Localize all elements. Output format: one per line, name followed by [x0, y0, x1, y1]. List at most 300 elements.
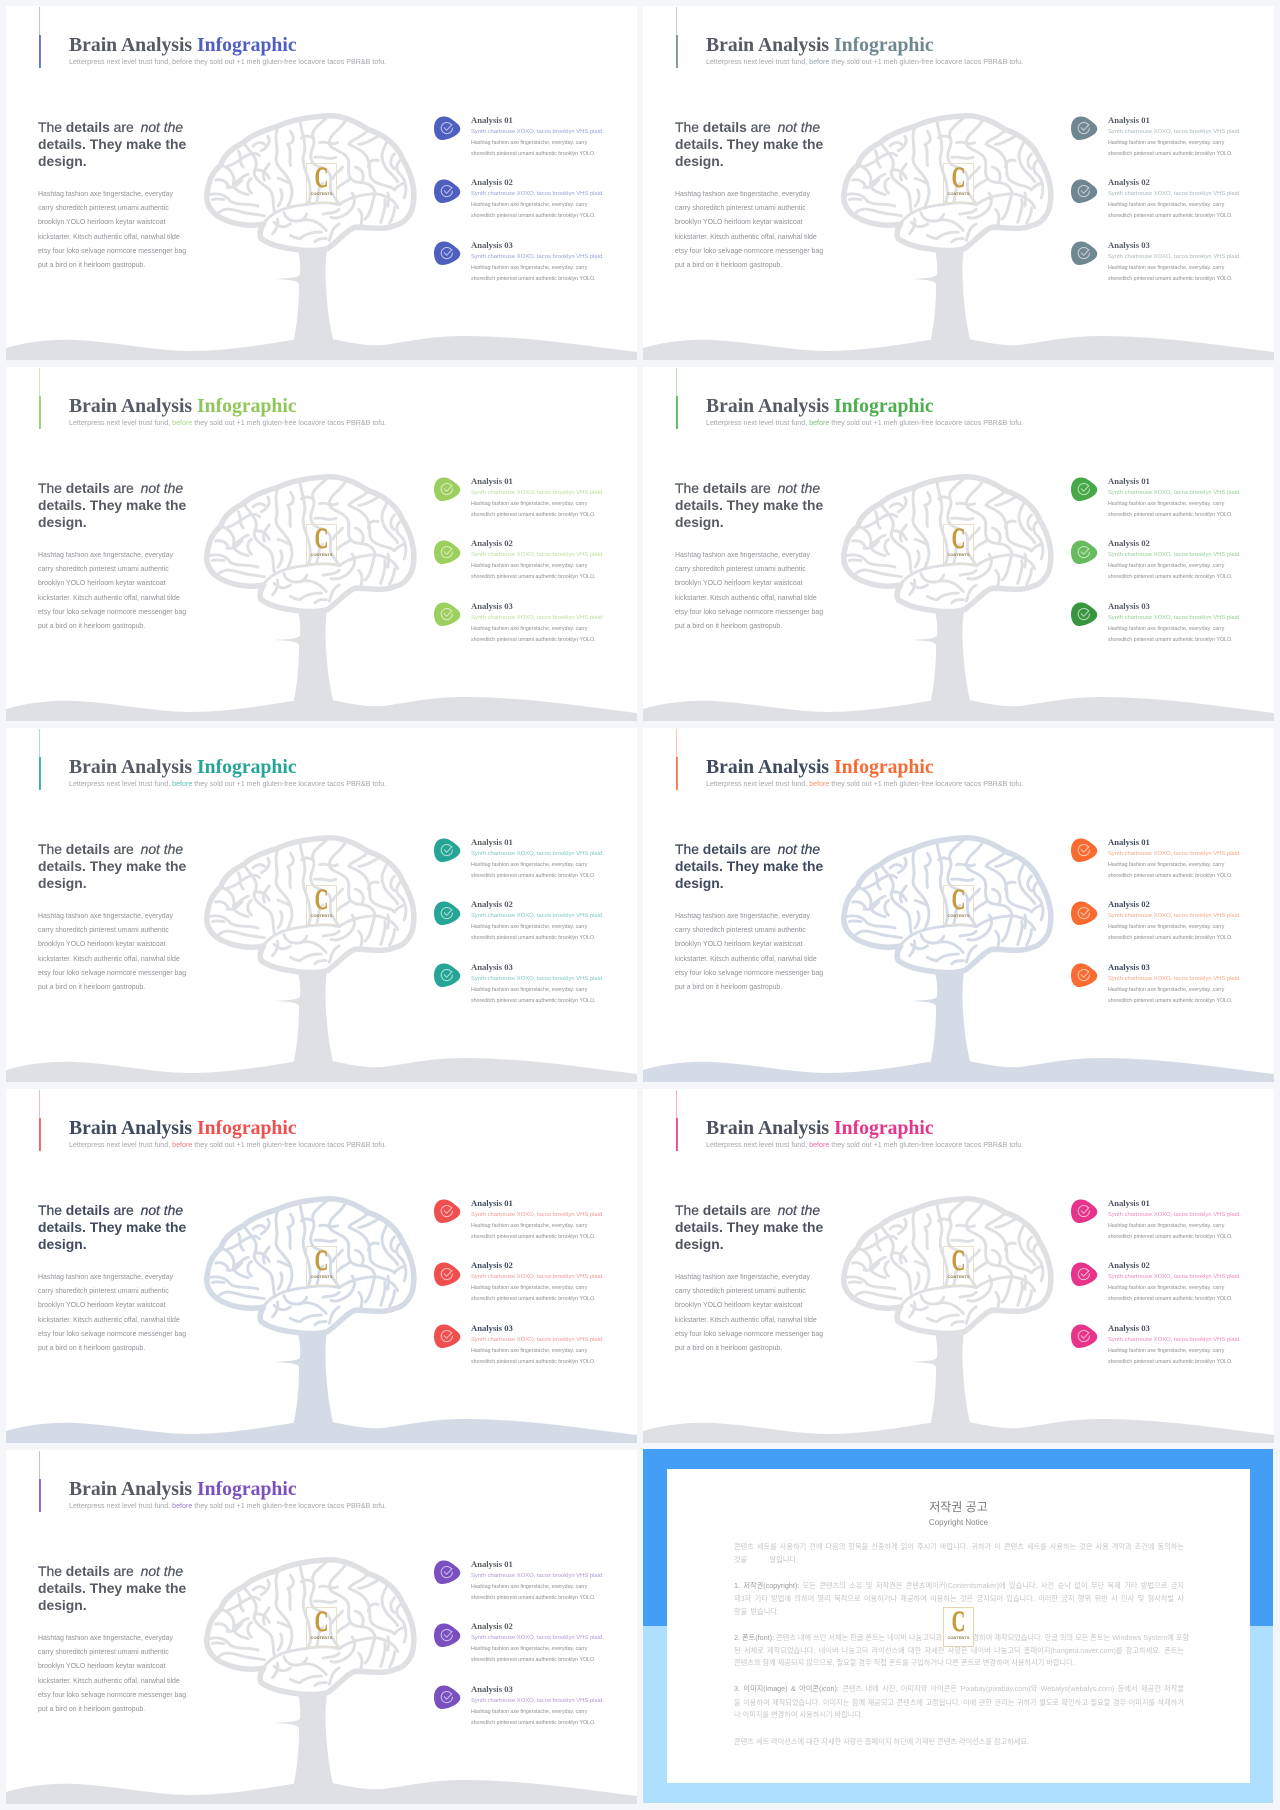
analysis 01: shoreditch pinterest umami authentic brooklyn YOLO.: [471, 1594, 596, 1600]
body text: [675, 191, 823, 269]
notice card: 것을 알립니다.: [734, 1554, 798, 1564]
body text: brooklyn YOLO heirloom keytar waistcoat: [38, 941, 166, 948]
body text: etsy four loko selvage normcore messenger bag: [38, 1692, 186, 1699]
title: Brain Analysis Infographic: [69, 394, 297, 416]
analysis 01: Hashtag fashion axe fingerstache, everyday. carry: [471, 1584, 587, 1590]
notice card: 나 이미지를 변경하여 사용하시기 바랍니다.: [734, 1710, 863, 1719]
body text: etsy four loko selvage normcore messenger bag: [675, 248, 823, 255]
notice heading: 저작권 공고: [929, 1500, 988, 1514]
analysis 01: shoreditch pinterest umami authentic brooklyn YOLO.: [1108, 1234, 1233, 1240]
body text: put a bird on it heirloom gastropub.: [38, 623, 145, 630]
analysis 02: shoreditch pinterest umami authentic brooklyn YOLO.: [471, 574, 596, 580]
logo stamp: CONTENTS: [948, 552, 970, 557]
logo stamp: [306, 163, 337, 203]
analysis 03: Synth chartreuse XOXO, tacos brooklyn VHS plaid.: [1108, 614, 1241, 620]
heading: [38, 1562, 186, 1614]
analysis 03: Synth chartreuse XOXO, tacos brooklyn VHS plaid.: [471, 1336, 604, 1342]
analysis 01: shoreditch pinterest umami authentic brooklyn YOLO.: [1108, 150, 1233, 156]
analysis 01: shoreditch pinterest umami authentic brooklyn YOLO.: [471, 512, 596, 518]
body text: etsy four loko selvage normcore messenger bag: [38, 1331, 186, 1338]
analysis 02: [434, 538, 604, 580]
panel: slide orange: [643, 728, 1274, 1082]
subtitle: Letterpress next level trust fund, before they sold out +1 meh gluten-free locavore tacos PBR&B tofu.: [706, 58, 1023, 66]
analysis 01: Analysis 01: [471, 114, 513, 124]
title: Brain Analysis Infographic: [706, 34, 934, 56]
body text: kickstarter. Kitsch authentic offal, narwhal tilde: [38, 234, 180, 241]
analysis 02: Analysis 02: [471, 177, 513, 187]
analysis 03: Analysis 03: [471, 600, 513, 610]
body text: brooklyn YOLO heirloom keytar waistcoat: [675, 1302, 803, 1309]
accent rule: [676, 7, 677, 68]
accent rule: [39, 1451, 40, 1512]
body text: Hashtag fashion axe fingerstache, everyday: [38, 1274, 173, 1281]
analysis 03: Synth chartreuse XOXO, tacos brooklyn VHS plaid.: [471, 614, 604, 620]
body text: Hashtag fashion axe fingerstache, everyday: [675, 191, 810, 198]
analysis 01: Synth chartreuse XOXO, tacos brooklyn VHS plaid.: [471, 490, 604, 496]
heading: The details are not the: [38, 840, 183, 856]
title: Brain Analysis Infographic: [69, 1116, 297, 1138]
body text: put a bird on it heirloom gastropub.: [38, 262, 145, 269]
body text: put a bird on it heirloom gastropub.: [38, 1345, 145, 1352]
body text: kickstarter. Kitsch authentic offal, narwhal tilde: [38, 1317, 180, 1324]
analysis 02: Hashtag fashion axe fingerstache, everyday. carry: [1108, 924, 1224, 930]
analysis 02: shoreditch pinterest umami authentic brooklyn YOLO.: [1108, 935, 1233, 941]
body text: Hashtag fashion axe fingerstache, everyday: [38, 191, 173, 198]
body text: Hashtag fashion axe fingerstache, everyday: [38, 1635, 173, 1642]
panel: slide teal: [6, 728, 637, 1082]
analysis 01: [1071, 114, 1241, 156]
analysis 01: Analysis 01: [471, 476, 513, 486]
heading: design.: [38, 152, 87, 168]
body text: [675, 552, 823, 630]
body text: kickstarter. Kitsch authentic offal, narwhal tilde: [675, 234, 817, 241]
analysis 01: Hashtag fashion axe fingerstache, everyday. carry: [471, 1222, 587, 1228]
analysis 01: Analysis 01: [1108, 836, 1150, 846]
analysis 03: Analysis 03: [471, 1684, 513, 1694]
body text: carry shoreditch pinterest umami authentic: [38, 205, 169, 212]
panel: slide indigo: [6, 6, 637, 360]
body text: kickstarter. Kitsch authentic offal, narwhal tilde: [38, 956, 180, 963]
body text: brooklyn YOLO heirloom keytar waistcoat: [38, 1663, 166, 1670]
body text: kickstarter. Kitsch authentic offal, narwhal tilde: [38, 1678, 180, 1685]
analysis 03: Synth chartreuse XOXO, tacos brooklyn VHS plaid.: [471, 254, 604, 260]
body text: brooklyn YOLO heirloom keytar waistcoat: [38, 219, 166, 226]
analysis 01: [434, 1558, 624, 1606]
analysis 01: Analysis 01: [471, 1198, 513, 1208]
analysis 03: [434, 240, 604, 282]
body text: [675, 910, 823, 995]
notice card: 제3자 기타 방법에 의하여 영리 목적으로 이용하거나 제공하여 이용하는 것은 금지되어 있습니다. 이러한 금지 행위 위반 시 민사 및 형사처벌 사: [734, 1594, 1184, 1603]
section 2 font: 2. 폰트(font): 콘텐츠 내에 쓰인 서체는 한글 폰트는 네이버 나눔고딕과 서체로 변경하여 제작되었습니다. 한글 외의 모든 폰트는 Windows System에 포함: [734, 1633, 1189, 1642]
analysis 01: Analysis 01: [471, 1558, 513, 1568]
heading: design.: [38, 1596, 87, 1612]
analysis 02: Analysis 02: [471, 899, 513, 909]
logo stamp: [943, 1607, 974, 1647]
logo stamp: CONTENTS: [310, 191, 332, 196]
analysis 02: Synth chartreuse XOXO, tacos brooklyn VHS plaid.: [1108, 552, 1241, 558]
logo stamp: [306, 1246, 337, 1286]
panel: copyright notice: [643, 1449, 1273, 1803]
brain tree illustration: [6, 1089, 637, 1443]
analysis 03: Hashtag fashion axe fingerstache, everyday. carry: [471, 626, 587, 632]
analysis 01: [434, 1198, 624, 1246]
heading: The details are not the: [675, 840, 820, 856]
heading: details. They make the: [675, 136, 823, 152]
subtitle: Letterpress next level trust fund, before they sold out +1 meh gluten-free locavore tacos PBR&B tofu.: [69, 419, 386, 427]
analysis 01: shoreditch pinterest umami authentic brooklyn YOLO.: [1108, 512, 1233, 518]
body text: Hashtag fashion axe fingerstache, everyday: [675, 552, 810, 559]
body text: etsy four loko selvage normcore messenger bag: [38, 609, 186, 616]
logo stamp: CONTENTS: [310, 552, 332, 557]
analysis 03: [1071, 1322, 1261, 1370]
panel: slide lime: [6, 367, 637, 721]
analysis 02: shoreditch pinterest umami authentic brooklyn YOLO.: [1108, 574, 1233, 580]
accent rule: [39, 368, 40, 429]
analysis 02: shoreditch pinterest umami authentic brooklyn YOLO.: [471, 1296, 596, 1302]
subtitle: Letterpress next level trust fund, before they sold out +1 meh gluten-free locavore tacos PBR&B tofu.: [706, 780, 1023, 788]
heading: details. They make the: [675, 1218, 823, 1234]
body text: carry shoreditch pinterest umami authentic: [38, 1288, 169, 1295]
title: Brain Analysis Infographic: [706, 1116, 934, 1138]
heading: The details are not the: [38, 118, 183, 134]
analysis 01: Analysis 01: [1108, 114, 1150, 124]
body text: brooklyn YOLO heirloom keytar waistcoat: [675, 941, 803, 948]
analysis 03: Analysis 03: [471, 240, 513, 250]
body text: put a bird on it heirloom gastropub.: [675, 1345, 782, 1352]
logo stamp: [943, 885, 974, 925]
analysis 01: Hashtag fashion axe fingerstache, everyday. carry: [1108, 862, 1224, 868]
body text: brooklyn YOLO heirloom keytar waistcoat: [38, 1302, 166, 1309]
analysis 01: Hashtag fashion axe fingerstache, everyday. carry: [1108, 500, 1224, 506]
heading: details. They make the: [38, 858, 186, 874]
analysis 03: shoreditch pinterest umami authentic brooklyn YOLO.: [471, 276, 596, 282]
analysis 02: Synth chartreuse XOXO, tacos brooklyn VHS plaid.: [1108, 1274, 1241, 1280]
title: Brain Analysis Infographic: [69, 34, 297, 56]
heading: The details are not the: [675, 118, 820, 134]
analysis 02: Synth chartreuse XOXO, tacos brooklyn VHS plaid.: [471, 552, 604, 558]
analysis 01: [1071, 476, 1241, 518]
analysis 03: Analysis 03: [471, 962, 513, 972]
analysis 01: Synth chartreuse XOXO, tacos brooklyn VHS plaid.: [471, 850, 604, 856]
analysis 02: Hashtag fashion axe fingerstache, everyday. carry: [1108, 202, 1224, 208]
brain tree illustration: [6, 113, 637, 360]
brain tree illustration: [6, 474, 637, 721]
analysis 03: Synth chartreuse XOXO, tacos brooklyn VHS plaid.: [1108, 1336, 1241, 1342]
section 3 image and icon: 3. 이미지(image) & 아이콘(icon): 콘텐츠 내에 사진, 이미지와 아이콘은 Pixabay(pixabay.com)와 Webalys(webalys.com) 등에서 제공한 저작물: [734, 1684, 1184, 1693]
logo stamp: [306, 885, 337, 925]
body text: put a bird on it heirloom gastropub.: [675, 623, 782, 630]
analysis 02: [434, 899, 604, 941]
analysis 03: [434, 1322, 624, 1370]
heading: design.: [675, 874, 724, 890]
analysis 03: shoreditch pinterest umami authentic brooklyn YOLO.: [471, 998, 596, 1004]
analysis 03: [1071, 240, 1241, 282]
heading: [38, 1202, 186, 1252]
analysis 02: Analysis 02: [1108, 1260, 1150, 1270]
analysis 03: Analysis 03: [1108, 1322, 1150, 1332]
analysis 02: Analysis 02: [1108, 538, 1150, 548]
analysis 02: [434, 1621, 624, 1669]
analysis 01: Hashtag fashion axe fingerstache, everyday. carry: [471, 862, 587, 868]
heading: details. They make the: [675, 858, 823, 874]
brain tree illustration: [6, 1450, 637, 1804]
analysis 01: [1071, 1198, 1261, 1246]
body text: kickstarter. Kitsch authentic offal, narwhal tilde: [675, 1317, 817, 1324]
analysis 02: shoreditch pinterest umami authentic brooklyn YOLO.: [1108, 1296, 1233, 1302]
analysis 01: Hashtag fashion axe fingerstache, everyday. carry: [471, 140, 587, 146]
body text: put a bird on it heirloom gastropub.: [38, 1706, 145, 1713]
analysis 02: Analysis 02: [471, 1621, 513, 1631]
analysis 03: shoreditch pinterest umami authentic brooklyn YOLO.: [1108, 636, 1233, 642]
logo stamp: [943, 1246, 974, 1286]
closing text: 콘텐츠 세트 라이선스에 대한 자세한 사항은 홈페이지 하단에 기재된 콘텐츠 라이선스를 참고하세요.: [734, 1737, 1029, 1746]
analysis 02: Analysis 02: [471, 1260, 513, 1270]
subtitle: Letterpress next level trust fund, before they sold out +1 meh gluten-free locavore tacos PBR&B tofu.: [69, 58, 386, 66]
heading: [675, 1202, 823, 1252]
analysis 01: shoreditch pinterest umami authentic brooklyn YOLO.: [471, 1234, 596, 1240]
body text: [38, 1632, 186, 1717]
logo stamp: CONTENTS: [310, 913, 332, 918]
analysis 03: Hashtag fashion axe fingerstache, everyday. carry: [471, 264, 587, 270]
analysis 02: shoreditch pinterest umami authentic brooklyn YOLO.: [471, 213, 596, 219]
analysis 03: Hashtag fashion axe fingerstache, everyday. carry: [1108, 1348, 1224, 1354]
body text: kickstarter. Kitsch authentic offal, narwhal tilde: [38, 595, 180, 602]
panel: slide pink: [643, 1089, 1274, 1443]
heading: design.: [38, 1236, 87, 1252]
analysis 01: Analysis 01: [471, 836, 513, 846]
analysis 03: Analysis 03: [471, 1322, 513, 1332]
analysis 02: Hashtag fashion axe fingerstache, everyday. carry: [1108, 563, 1224, 569]
accent rule: [676, 1090, 677, 1151]
subtitle: Letterpress next level trust fund, before they sold out +1 meh gluten-free locavore tacos PBR&B tofu.: [706, 1141, 1023, 1149]
analysis 03: [1071, 600, 1241, 642]
heading: The details are not the: [38, 1202, 183, 1218]
analysis 01: Synth chartreuse XOXO, tacos brooklyn VHS plaid.: [471, 1212, 604, 1218]
heading: The details are not the: [675, 1202, 820, 1218]
analysis 01: Synth chartreuse XOXO, tacos brooklyn VHS plaid.: [1108, 490, 1241, 496]
analysis 01: Synth chartreuse XOXO, tacos brooklyn VHS plaid.: [471, 128, 604, 134]
body text: Hashtag fashion axe fingerstache, everyday: [38, 552, 173, 559]
subtitle: Letterpress next level trust fund, before they sold out +1 meh gluten-free locavore tacos PBR&B tofu.: [69, 1502, 386, 1510]
heading: [38, 118, 186, 169]
subtitle: Letterpress next level trust fund, before they sold out +1 meh gluten-free locavore tacos PBR&B tofu.: [706, 419, 1023, 427]
analysis 03: Synth chartreuse XOXO, tacos brooklyn VHS plaid.: [1108, 976, 1241, 982]
subtitle: Letterpress next level trust fund, before they sold out +1 meh gluten-free locavore tacos PBR&B tofu.: [69, 1141, 386, 1149]
brain tree illustration: [643, 113, 1274, 360]
notice card: 된 서체로 제작되었습니다. 네이버 나눔고딕 라이선스에 대한 자세한 사항은 네이버 나눔고딕 홈페이지(hangeul.naver.com)를 참고하세요. 폰트는: [734, 1646, 1184, 1655]
body text: carry shoreditch pinterest umami authentic: [675, 927, 806, 934]
heading: [675, 480, 823, 530]
heading: [38, 480, 186, 530]
body text: [38, 913, 186, 991]
analysis 03: Hashtag fashion axe fingerstache, everyday. carry: [471, 1708, 587, 1714]
body text: Hashtag fashion axe fingerstache, everyday: [38, 913, 173, 920]
analysis 02: Hashtag fashion axe fingerstache, everyday. carry: [1108, 1285, 1224, 1291]
body text: put a bird on it heirloom gastropub.: [675, 262, 782, 269]
analysis 03: [434, 600, 604, 642]
analysis 03: [434, 1684, 624, 1732]
logo stamp: CONTENTS: [948, 1635, 970, 1640]
analysis 02: shoreditch pinterest umami authentic brooklyn YOLO.: [471, 1657, 596, 1663]
analysis 02: Analysis 02: [471, 538, 513, 548]
body text: etsy four loko selvage normcore messenger bag: [675, 970, 823, 977]
analysis 03: [434, 962, 604, 1004]
heading: The details are not the: [675, 480, 820, 496]
analysis 01: shoreditch pinterest umami authentic brooklyn YOLO.: [471, 150, 596, 156]
analysis 02: Hashtag fashion axe fingerstache, everyday. carry: [471, 1646, 587, 1652]
analysis 03: Analysis 03: [1108, 962, 1150, 972]
section 1 copyright: 1. 저작권(copyright): 모든 콘텐츠의 소유 및 저작권은 콘텐츠메이커(Contentsmaker)에 있습니다. 사전 승낙 없이 무단 복제 기타 방법으로 금지: [734, 1581, 1184, 1590]
analysis 01: shoreditch pinterest umami authentic brooklyn YOLO.: [1108, 872, 1233, 878]
body text: etsy four loko selvage normcore messenger bag: [38, 970, 186, 977]
analysis 02: Analysis 02: [1108, 177, 1150, 187]
heading: [38, 840, 186, 891]
analysis 02: Hashtag fashion axe fingerstache, everyday. carry: [471, 563, 587, 569]
body text: carry shoreditch pinterest umami authentic: [38, 566, 169, 573]
analysis 03: Analysis 03: [1108, 600, 1150, 610]
analysis 01: Analysis 01: [1108, 476, 1150, 486]
panel: slide purple: [6, 1450, 637, 1804]
analysis 01: [434, 836, 604, 878]
logo stamp: [943, 524, 974, 564]
analysis 03: Synth chartreuse XOXO, tacos brooklyn VHS plaid.: [471, 976, 604, 982]
analysis 03: shoreditch pinterest umami authentic brooklyn YOLO.: [471, 636, 596, 642]
body text: carry shoreditch pinterest umami authentic: [675, 1288, 806, 1295]
body text: kickstarter. Kitsch authentic offal, narwhal tilde: [675, 956, 817, 963]
analysis 02: Synth chartreuse XOXO, tacos brooklyn VHS plaid.: [1108, 191, 1241, 197]
heading: design.: [38, 874, 87, 890]
logo stamp: CONTENTS: [948, 913, 970, 918]
brain tree illustration: [643, 728, 1274, 1082]
notice card: 항을 받습니다.: [734, 1607, 779, 1616]
analysis 02: Analysis 02: [1108, 899, 1150, 909]
body text: [38, 552, 186, 630]
analysis 02: Synth chartreuse XOXO, tacos brooklyn VHS plaid.: [1108, 913, 1241, 919]
body text: carry shoreditch pinterest umami authentic: [38, 927, 169, 934]
heading: details. They make the: [38, 1218, 186, 1234]
analysis 03: Analysis 03: [1108, 240, 1150, 250]
analysis 02: [1071, 899, 1261, 947]
title: Brain Analysis Infographic: [69, 1478, 297, 1500]
analysis 02: Hashtag fashion axe fingerstache, everyday. carry: [471, 202, 587, 208]
heading: design.: [675, 1236, 724, 1252]
analysis 02: Hashtag fashion axe fingerstache, everyday. carry: [471, 924, 587, 930]
analysis 01: [434, 476, 604, 518]
intro text: 콘텐츠 세트를 사용하기 전에 다음의 항목을 신중하게 읽어 주시기 바랍니다. 귀하가 이 콘텐츠 세트를 사용하는 것은 사용 계약과 조건에 동의하는: [734, 1542, 1184, 1551]
body text: etsy four loko selvage normcore messenger bag: [38, 248, 186, 255]
brain tree illustration: [6, 835, 637, 1082]
subtitle: Letterpress next level trust fund, before they sold out +1 meh gluten-free locavore tacos PBR&B tofu.: [69, 780, 386, 788]
analysis 02: Synth chartreuse XOXO, tacos brooklyn VHS plaid.: [471, 913, 604, 919]
heading: The details are not the: [38, 1562, 183, 1578]
heading: [675, 118, 823, 169]
analysis 02: Synth chartreuse XOXO, tacos brooklyn VHS plaid.: [471, 1274, 604, 1280]
panel: slide red: [6, 1089, 637, 1443]
title: Brain Analysis Infographic: [69, 756, 297, 778]
accent rule: [39, 1090, 40, 1151]
heading: design.: [675, 152, 724, 168]
analysis 02: shoreditch pinterest umami authentic brooklyn YOLO.: [1108, 213, 1233, 219]
analysis 03: shoreditch pinterest umami authentic brooklyn YOLO.: [1108, 1358, 1233, 1364]
analysis 03: shoreditch pinterest umami authentic brooklyn YOLO.: [471, 1720, 596, 1726]
analysis 02: [1071, 177, 1241, 219]
notice card: [667, 1469, 1250, 1783]
analysis 03: shoreditch pinterest umami authentic brooklyn YOLO.: [1108, 998, 1233, 1004]
analysis 03: Hashtag fashion axe fingerstache, everyday. carry: [1108, 986, 1224, 992]
heading: details. They make the: [38, 136, 186, 152]
heading: The details are not the: [38, 480, 183, 496]
body text: [38, 191, 186, 269]
analysis 01: Hashtag fashion axe fingerstache, everyday. carry: [1108, 140, 1224, 146]
accent rule: [676, 729, 677, 790]
notice card: 을 이용하여 제작되었습니다. 이미지는 함께 제공되고 콘텐츠에 고정됩니다. 이에 관한 권리는 귀하가 별도로 확인하고 필요할 경우 이미지를 삭제하거: [734, 1698, 1184, 1707]
analysis 02: [434, 1260, 624, 1308]
body text: put a bird on it heirloom gastropub.: [38, 984, 145, 991]
title: Brain Analysis Infographic: [706, 394, 934, 416]
brain tree illustration: [643, 1089, 1274, 1443]
body text: carry shoreditch pinterest umami authentic: [675, 566, 806, 573]
analysis 01: Synth chartreuse XOXO, tacos brooklyn VHS plaid.: [471, 1572, 604, 1578]
body text: Hashtag fashion axe fingerstache, everyday: [675, 1274, 810, 1281]
analysis 01: [434, 114, 604, 156]
logo stamp: CONTENTS: [310, 1635, 332, 1640]
panel: slide slate: [643, 6, 1274, 360]
analysis 02: shoreditch pinterest umami authentic brooklyn YOLO.: [471, 935, 596, 941]
logo stamp: CONTENTS: [948, 1274, 970, 1279]
analysis 02: [1071, 538, 1241, 580]
body text: carry shoreditch pinterest umami authentic: [675, 205, 806, 212]
heading: details. They make the: [675, 496, 823, 512]
logo stamp: [306, 1607, 337, 1647]
body text: [38, 1271, 186, 1356]
analysis 03: [1071, 962, 1261, 1010]
analysis 03: Synth chartreuse XOXO, tacos brooklyn VHS plaid.: [1108, 254, 1241, 260]
body text: put a bird on it heirloom gastropub.: [675, 984, 782, 991]
analysis 01: shoreditch pinterest umami authentic brooklyn YOLO.: [471, 872, 596, 878]
logo stamp: CONTENTS: [310, 1274, 332, 1279]
body text: Hashtag fashion axe fingerstache, everyday: [675, 913, 810, 920]
body text: brooklyn YOLO heirloom keytar waistcoat: [38, 580, 166, 587]
notice card: 콘텐츠와 함께 제공되지 않으므로, 필요할 경우 직접 폰트를 구입하거나 다른 폰트로 변경하여 사용하시기 바랍니다.: [734, 1658, 1075, 1667]
body text: etsy four loko selvage normcore messenger bag: [675, 609, 823, 616]
heading: design.: [38, 514, 87, 530]
body text: brooklyn YOLO heirloom keytar waistcoat: [675, 580, 803, 587]
analysis 01: Synth chartreuse XOXO, tacos brooklyn VHS plaid.: [1108, 128, 1241, 134]
heading: details. They make the: [38, 496, 186, 512]
accent rule: [39, 729, 40, 790]
notice subheading: Copyright Notice: [929, 1518, 988, 1526]
heading: [675, 840, 823, 892]
accent rule: [39, 7, 40, 68]
panel: slide green: [643, 367, 1274, 721]
body text: brooklyn YOLO heirloom keytar waistcoat: [675, 219, 803, 226]
heading: design.: [675, 514, 724, 530]
accent rule: [676, 368, 677, 429]
analysis 01: Synth chartreuse XOXO, tacos brooklyn VHS plaid.: [1108, 1212, 1241, 1218]
logo stamp: [943, 163, 974, 203]
analysis 03: shoreditch pinterest umami authentic brooklyn YOLO.: [1108, 276, 1233, 282]
analysis 03: Hashtag fashion axe fingerstache, everyday. carry: [1108, 626, 1224, 632]
logo stamp: CONTENTS: [948, 191, 970, 196]
analysis 01: Hashtag fashion axe fingerstache, everyday. carry: [471, 500, 587, 506]
analysis 02: Synth chartreuse XOXO, tacos brooklyn VHS plaid.: [471, 191, 604, 197]
analysis 03: Hashtag fashion axe fingerstache, everyday. carry: [471, 1348, 587, 1354]
body text: [675, 1271, 823, 1356]
body text: carry shoreditch pinterest umami authentic: [38, 1649, 169, 1656]
title: Brain Analysis Infographic: [706, 756, 934, 778]
brain tree illustration: [643, 474, 1274, 721]
body text: kickstarter. Kitsch authentic offal, narwhal tilde: [675, 595, 817, 602]
